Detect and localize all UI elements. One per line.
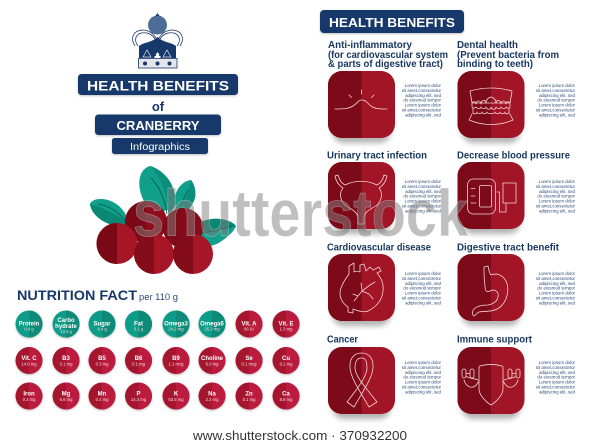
nutrient: Mg: Mg: [62, 392, 71, 398]
nutrition heading: per 110 g: [139, 292, 178, 302]
nutrient: Zn: [236, 382, 262, 410]
nutrient: B5: B5: [98, 356, 106, 362]
lorem text: sit amet,consectetur: [536, 203, 576, 208]
heading: Urinary tract infection: [327, 150, 427, 162]
subtitle banner: Infographics: Infographics: [130, 142, 190, 153]
heading: Cancer: [327, 334, 358, 346]
nutrient: Choline: [198, 347, 226, 374]
nutrient: P: [125, 382, 152, 410]
heading: Immune support: [457, 334, 532, 346]
icon: heart: [328, 254, 395, 321]
lorem text: sit amet,consectetur: [402, 107, 442, 112]
lorem text: Lorem ipsum dolor: [405, 360, 442, 365]
nutrient: B5: 0.3 mg: [96, 362, 109, 366]
nutrient: Protein: Protein: [19, 322, 40, 328]
heading: (Prevent bacteria from: [457, 49, 559, 61]
nutrient: Vit. A: Vit. A: [241, 322, 257, 328]
nutrient: Vit. E: [272, 310, 300, 338]
lorem text: do eiusmod tempor: [537, 194, 576, 199]
panel: urinary tract infection: [327, 150, 442, 234]
nutrient: Mn: 0.4 mg: [96, 397, 109, 402]
nutrient: Vit. C: 14.6 mg: [21, 362, 37, 366]
nutrient: Vit. A: [236, 310, 262, 338]
heading: Digestive tract benefit: [457, 242, 559, 254]
nutrient: Mg: 6.6 mg: [60, 397, 73, 402]
nutrient: B5: [88, 347, 116, 374]
nutrient: Choline: Choline: [201, 356, 224, 362]
nutrient: Carbohydrate: 13.4 g: [60, 329, 72, 334]
lorem text: do eiusmod tempor: [537, 286, 576, 291]
nutrient: Na: [198, 382, 226, 410]
lorem text: adipiscing elit, sed: [405, 281, 442, 286]
nutrient: Sugar: Sugar: [93, 322, 111, 328]
lorem text: sit amet,consectetur: [402, 184, 442, 189]
heading: binding to teeth): [457, 58, 533, 70]
lorem text: adipiscing elit, sed: [405, 189, 442, 194]
nutrient: B9: 1.1 mcg: [169, 362, 184, 366]
illustration: cranberries and leaves: [90, 166, 236, 274]
lorem text: adipiscing elit, sed: [539, 370, 576, 375]
title banner: Cranberry: [95, 114, 221, 135]
nutrient: B6: [125, 347, 152, 374]
nutrient: B3: B3: [62, 356, 70, 362]
berry: bottom middle: [134, 234, 174, 274]
nutrient: Cu: 0.1 mg: [280, 362, 293, 366]
nutrient: Sugar: [88, 310, 116, 338]
heading: Decrease blood pressure: [457, 150, 570, 162]
lorem text: Lorem ipsum dolor: [539, 360, 576, 365]
lorem text: adipiscing elit, sed: [539, 300, 576, 305]
card shadow: [332, 259, 391, 326]
panel: decrease blood pressure: [457, 150, 576, 234]
lorem text: adipiscing elit, sed: [539, 281, 576, 286]
nutrient: Carbohydrate: hydrate: [55, 324, 77, 330]
lorem text: sit amet,consectetur: [402, 203, 442, 208]
lorem text: Lorem ipsum dolor: [405, 271, 442, 276]
nutrient: Zn: 0.1 mg: [243, 397, 256, 402]
nutrition fact grid: [16, 310, 300, 410]
lorem text: do eiusmod tempor: [403, 98, 442, 103]
panel: immune support: [457, 334, 576, 419]
lorem text: do eiusmod tempor: [537, 98, 576, 103]
card shadow: [462, 259, 520, 326]
nutrient: Ca: [272, 382, 300, 410]
title banner: Health Benefits: [78, 74, 238, 95]
leaf: top: [139, 166, 175, 214]
lorem text: sit amet,consectetur: [402, 276, 442, 281]
nutrient: Omega3: 24.2 mg: [168, 326, 184, 332]
nutrient: Omega6: 35.3 mg: [204, 326, 220, 332]
nutrient: B9: B9: [172, 356, 180, 362]
lorem text: adipiscing elit, sed: [405, 112, 442, 117]
heading: Cardiovascular disease: [327, 242, 431, 254]
icon: blood pressure monitor: [458, 162, 524, 229]
right column heading banner: HEALTH BENEFITS: [329, 15, 455, 30]
nutrient: Protein: [16, 310, 42, 338]
card shadow: [332, 167, 391, 234]
lorem text: sit amet,consectetur: [536, 384, 576, 389]
lorem text: Lorem ipsum dolor: [405, 290, 442, 296]
nutrient: Fat: 0.1 g: [134, 326, 144, 332]
icon: inflamed skin: [328, 71, 395, 138]
lorem text: adipiscing elit, sed: [405, 389, 442, 394]
lorem text: Lorem ipsum dolor: [405, 179, 442, 184]
lorem text: adipiscing elit, sed: [539, 208, 576, 213]
panel: dental health: [457, 39, 576, 143]
card shadow: [462, 76, 520, 143]
berry: left: [96, 223, 138, 264]
lorem text: adipiscing elit, sed: [539, 93, 576, 98]
nutrient: Mn: Mn: [98, 392, 107, 398]
nutrient: Fat: [125, 310, 152, 338]
card shadow: [462, 167, 520, 234]
lorem text: do eiusmod tempor: [403, 375, 442, 380]
right column heading banner: [320, 10, 464, 33]
card shadow: [332, 76, 391, 143]
lorem text: Lorem ipsum dolor: [539, 102, 576, 108]
lorem text: adipiscing elit, sed: [405, 93, 442, 98]
lorem text: Lorem ipsum dolor: [539, 83, 576, 88]
watermark: shutterstock: [133, 176, 468, 250]
lorem text: Lorem ipsum dolor: [539, 179, 576, 184]
lorem text: Lorem ipsum dolor: [539, 271, 576, 276]
lorem text: Lorem ipsum dolor: [405, 83, 442, 88]
nutrient: K: K: [174, 392, 179, 398]
nutrient: Carbohydrate: [52, 310, 80, 338]
nutrient: Vit. E: 1.3 mg: [280, 326, 293, 332]
heading: [328, 39, 448, 70]
nutrient: Na: 2.2 mg: [206, 397, 219, 402]
nutrient: Carbohydrate: Carbo: [57, 318, 75, 324]
berry: bottom right: [173, 234, 213, 274]
lorem text: Lorem ipsum dolor: [405, 102, 442, 108]
lorem text: do eiusmod tempor: [403, 194, 442, 199]
lorem text: sit amet,consectetur: [402, 295, 442, 300]
nutrient: B3: [52, 347, 80, 374]
lorem text: sit amet,consectetur: [536, 276, 576, 281]
heading: (for cardiovascular system: [328, 49, 448, 61]
nutrient: K: 93.5 mg: [168, 397, 184, 402]
lorem text: adipiscing elit, sed: [405, 208, 442, 213]
nutrient: Cu: Cu: [282, 356, 290, 362]
icon: shield and dumbbells: [458, 347, 524, 414]
nutrient: Omega6: Omega6: [200, 322, 224, 328]
berry: top left: [125, 201, 167, 243]
lorem text: sit amet,consectetur: [536, 184, 576, 189]
nutrient: P: 14.3 mg: [131, 397, 147, 402]
nutrient: Omega6: [198, 310, 226, 338]
nutrient: Omega3: Omega3: [164, 322, 188, 328]
nutrient: Ca: Ca: [282, 392, 290, 398]
nutrient: Omega3: [162, 310, 190, 338]
nutrient: B3: 0.1 mg: [60, 362, 73, 366]
lorem text: sit amet,consectetur: [536, 107, 576, 112]
lorem text: sit amet,consectetur: [536, 295, 576, 300]
nutrient: Protein: 0.4 g: [24, 326, 34, 332]
icon: awareness ribbon: [328, 347, 395, 414]
berry: top right: [163, 208, 203, 248]
nutrient: K: [162, 382, 190, 410]
panel: anti-inflammatory: [328, 39, 448, 143]
nutrient: B6: B6: [135, 356, 143, 362]
nutrition heading: NUTRITION FACT: [17, 287, 137, 303]
nutrient: Iron: 0.3 mg: [23, 397, 36, 402]
lorem text: adipiscing elit, sed: [539, 189, 576, 194]
panel: cancer: [327, 334, 442, 419]
lorem text: adipiscing elit, sed: [539, 112, 576, 117]
nutrient: Fat: Fat: [134, 322, 143, 328]
card shadow: [462, 352, 520, 419]
subtitle: of: of: [152, 99, 165, 114]
heading: & parts of digestive tract): [328, 58, 443, 70]
heading: Anti-inflammatory: [328, 39, 412, 51]
nutrient: Ca: 8.8 mg: [280, 397, 293, 402]
nutrient: P: P: [136, 392, 141, 398]
lorem text: adipiscing elit, sed: [539, 389, 576, 394]
leaf: small: [175, 180, 195, 216]
subtitle banner: Infographics: [112, 138, 208, 154]
lorem text: adipiscing elit, sed: [405, 300, 442, 305]
nutrient: Mg: [52, 382, 80, 410]
lorem text: Lorem ipsum dolor: [405, 380, 442, 384]
icon: crown: [133, 13, 182, 68]
leaf: left: [90, 199, 129, 226]
lorem text: adipiscing elit, sed: [405, 370, 442, 375]
icon: teeth: [458, 71, 524, 138]
nutrient: Iron: [16, 382, 42, 410]
nutrient: Vit. A: 66 IU: [244, 326, 254, 332]
nutrient: Na: Na: [208, 392, 216, 398]
lorem text: Lorem ipsum dolor: [539, 198, 576, 204]
nutrient: Zn: Zn: [245, 392, 253, 398]
nutrient: Sugar: 4.4 g: [97, 326, 107, 332]
nutrient: Mn: [88, 382, 116, 410]
footer stock id: www.shutterstock.com · 370932200: [192, 428, 407, 443]
nutrient: Se: Se: [245, 356, 253, 362]
lorem text: sit amet,consectetur: [402, 88, 442, 93]
lorem text: sit amet,consectetur: [536, 88, 576, 93]
lorem text: do eiusmod tempor: [537, 375, 576, 380]
nutrient: Se: [236, 347, 262, 374]
panel: cardiovascular disease: [327, 242, 442, 326]
nutrient: Vit. C: Vit. C: [21, 356, 37, 362]
heading: [457, 39, 559, 70]
nutrient: B6: 0.1 mg: [132, 362, 146, 366]
lorem text: Lorem ipsum dolor: [539, 380, 576, 384]
lorem text: Lorem ipsum dolor: [405, 198, 442, 204]
icon: bladder: [328, 162, 395, 229]
title banner: Cranberry: CRANBERRY: [116, 118, 200, 133]
card shadow: [332, 352, 391, 419]
leaf: right: [197, 219, 236, 247]
nutrient: Se: 0.1 mcg: [242, 362, 257, 366]
lorem text: sit amet,consectetur: [536, 365, 576, 370]
nutrient: Cu: [272, 347, 300, 374]
heading: Dental health: [457, 39, 518, 51]
icon: stomach: [458, 254, 524, 321]
nutrient: B9: [162, 347, 190, 374]
nutrient: Iron: Iron: [23, 392, 35, 398]
lorem text: do eiusmod tempor: [403, 286, 442, 291]
lorem text: sit amet,consectetur: [402, 365, 442, 370]
nutrient: Vit. E: Vit. E: [279, 322, 293, 328]
nutrient: Vit. C: [16, 347, 42, 374]
lorem text: Lorem ipsum dolor: [539, 290, 576, 296]
title banner: Health Benefits: HEALTH BENEFITS: [87, 78, 229, 94]
lorem text: sit amet,consectetur: [402, 384, 442, 389]
nutrient: Choline: 6.0 mg: [206, 362, 219, 366]
panel: digestive tract benefit: [457, 242, 576, 326]
